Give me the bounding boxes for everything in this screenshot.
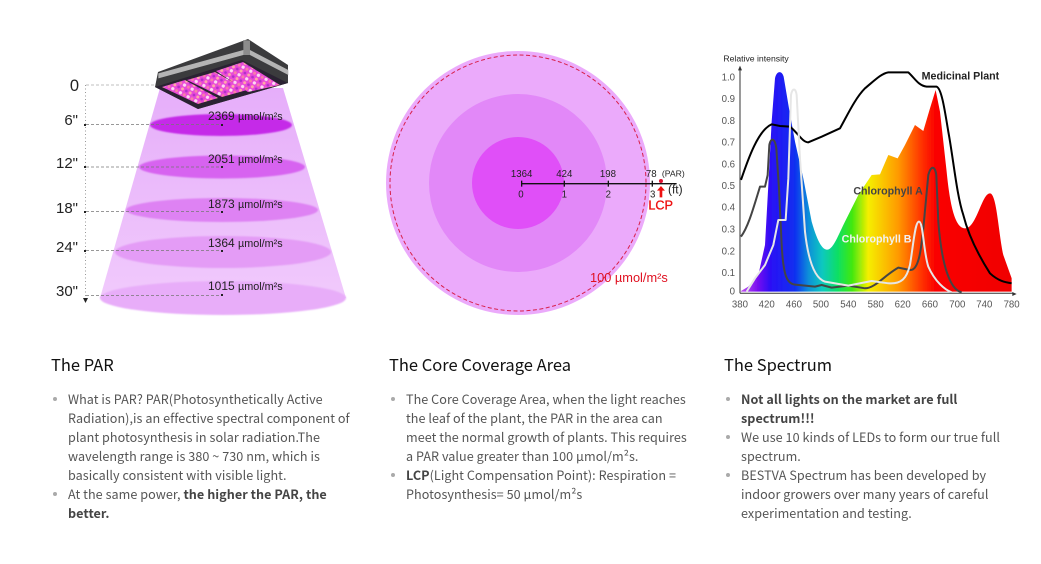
text: spectrum description: We use 10 kinds of LEDs to form our true full — [741, 427, 1000, 446]
y axis labels: 0.8 — [722, 116, 735, 127]
text: spectrum description: Not all lights on the market are full — [741, 389, 957, 408]
distance scale: 78 — [646, 169, 657, 180]
PAR readings: 1364 µmol/m²s — [208, 236, 283, 250]
PAR readings: 1015 µmol/m²s — [208, 279, 283, 293]
panel: core coverage circles — [386, 51, 685, 315]
PAR ellipses — [115, 114, 331, 268]
text: coverage description: Photosynthesis= 50 μmol/m²s — [406, 484, 582, 503]
distance scale: 1 — [562, 189, 567, 200]
bullet dot — [726, 473, 730, 477]
text: PAR description: Radiation),is an effective spectral component of — [68, 408, 350, 427]
y axis labels: 0.9 — [722, 94, 735, 105]
heading: The PAR: The PAR — [51, 352, 114, 376]
light cone — [100, 88, 346, 315]
coverage rings — [386, 51, 650, 315]
x axis labels: 580 — [868, 299, 884, 310]
distance scale: (PAR) — [662, 169, 685, 179]
panel: spectrum chart — [722, 54, 1020, 310]
text: PAR description: basically consistent with visible light. — [68, 465, 287, 484]
y axis labels: 0.1 — [722, 268, 735, 279]
LCP marker — [648, 179, 673, 212]
PAR readings: 1873 µmol/m²s — [208, 197, 283, 211]
x axis labels: 740 — [976, 299, 992, 310]
distance scale: (ft) — [668, 183, 683, 197]
bullet dot — [53, 397, 57, 401]
text: coverage description: the leaf of the plant, the PAR in the area can — [406, 408, 663, 427]
PAR readings — [208, 109, 283, 293]
x axis labels: 460 — [786, 299, 802, 310]
bullet dot — [726, 397, 730, 401]
x axis labels: 420 — [759, 299, 775, 310]
y axis labels — [722, 72, 736, 297]
distance scale: 2 — [606, 189, 611, 200]
chart labels: Medicinal Plant — [922, 70, 1000, 82]
text: spectrum description — [741, 389, 1000, 522]
axes — [740, 69, 1013, 293]
height scale: 24" — [56, 239, 78, 256]
spectrum area — [741, 72, 1012, 292]
heading: The Spectrum: The Spectrum — [724, 352, 832, 376]
y axis labels: 0.5 — [722, 181, 735, 192]
chart labels: Chlorophyll A — [853, 185, 923, 197]
x axis labels — [732, 299, 1020, 310]
chart labels: Relative intensity — [723, 54, 789, 64]
PAR readings: 2369 µmol/m²s — [208, 109, 283, 123]
panel: PAR light cone diagram — [56, 39, 346, 315]
bullet dot — [53, 492, 57, 496]
height scale: 6" — [64, 112, 78, 129]
text: PAR description — [68, 389, 350, 522]
distance scale: 424 — [556, 169, 573, 180]
text: coverage description — [406, 389, 687, 503]
bullet dot — [391, 397, 395, 401]
y axis labels: 0.6 — [722, 159, 735, 170]
height scale: 12" — [56, 155, 78, 172]
text: spectrum description: indoor growers over many years of careful — [741, 484, 988, 503]
y axis labels: 0 — [730, 286, 735, 297]
curve: Medicinal Plant — [741, 72, 1012, 283]
x axis labels: 620 — [895, 299, 911, 310]
text: coverage description: The Core Coverage Area, when the light reaches — [406, 389, 686, 408]
bullet dot — [726, 435, 730, 439]
distance scale: 198 — [600, 169, 616, 180]
LCP marker: LCP — [648, 198, 673, 212]
height scale: 30" — [56, 283, 78, 300]
y axis labels: 0.4 — [722, 203, 736, 214]
grow light fixture — [155, 39, 288, 109]
text: spectrum description: spectrum. — [741, 446, 801, 465]
x axis labels: 660 — [922, 299, 938, 310]
height scale: 0 — [70, 77, 79, 95]
bullet dot — [391, 473, 395, 477]
x axis labels: 780 — [1004, 299, 1020, 310]
text: spectrum description: BESTVA Spectrum has been developed by — [741, 465, 986, 484]
chart labels — [723, 54, 1000, 245]
boundary label: 100 µmol/m²s — [590, 270, 668, 285]
100 umol boundary — [390, 55, 646, 311]
text: coverage description: a PAR value greater than 100 μmol/m²s. — [406, 446, 638, 465]
heading: The Core Coverage Area: The Core Coverage Area — [389, 352, 571, 376]
text: PAR description: better. — [68, 503, 109, 522]
x axis labels: 380 — [732, 299, 748, 310]
chart labels: Chlorophyll B — [842, 233, 912, 245]
curve: Chlorophyll A — [741, 140, 962, 292]
text: PAR description: plant photosynthesis in solar radiation.The — [68, 427, 320, 446]
height scale: 18" — [56, 200, 78, 217]
distance scale: 0 — [518, 189, 524, 200]
distance scale — [511, 169, 685, 212]
height scale — [56, 77, 223, 303]
text: PAR description: What is PAR? PAR(Photosynthetically Active — [68, 389, 323, 408]
text: coverage description: meet the normal growth of plants. This requires — [406, 427, 687, 446]
text: coverage description: LCP(Light Compensation Point): Respiration = — [406, 465, 676, 484]
text: PAR description: wavelength range is 380 ~ 730 nm, which is — [68, 446, 320, 465]
x axis labels: 700 — [949, 299, 965, 310]
distance scale: 1364 — [511, 169, 533, 180]
text: spectrum description: spectrum!!! — [741, 408, 815, 427]
distance scale: 3 — [650, 189, 655, 200]
y axis labels: 1.0 — [722, 72, 735, 83]
text: spectrum description: experimentation and testing. — [741, 503, 912, 522]
y axis labels: 0.3 — [722, 225, 735, 236]
x axis labels: 500 — [813, 299, 829, 310]
y axis labels: 0.7 — [722, 138, 735, 149]
y axis labels: 0.2 — [722, 246, 735, 257]
curve: Chlorophyll B — [747, 89, 952, 292]
PAR readings: 2051 µmol/m²s — [208, 152, 283, 166]
x axis labels: 540 — [840, 299, 856, 310]
text: PAR description: At the same power, the higher the PAR, the — [68, 484, 327, 503]
